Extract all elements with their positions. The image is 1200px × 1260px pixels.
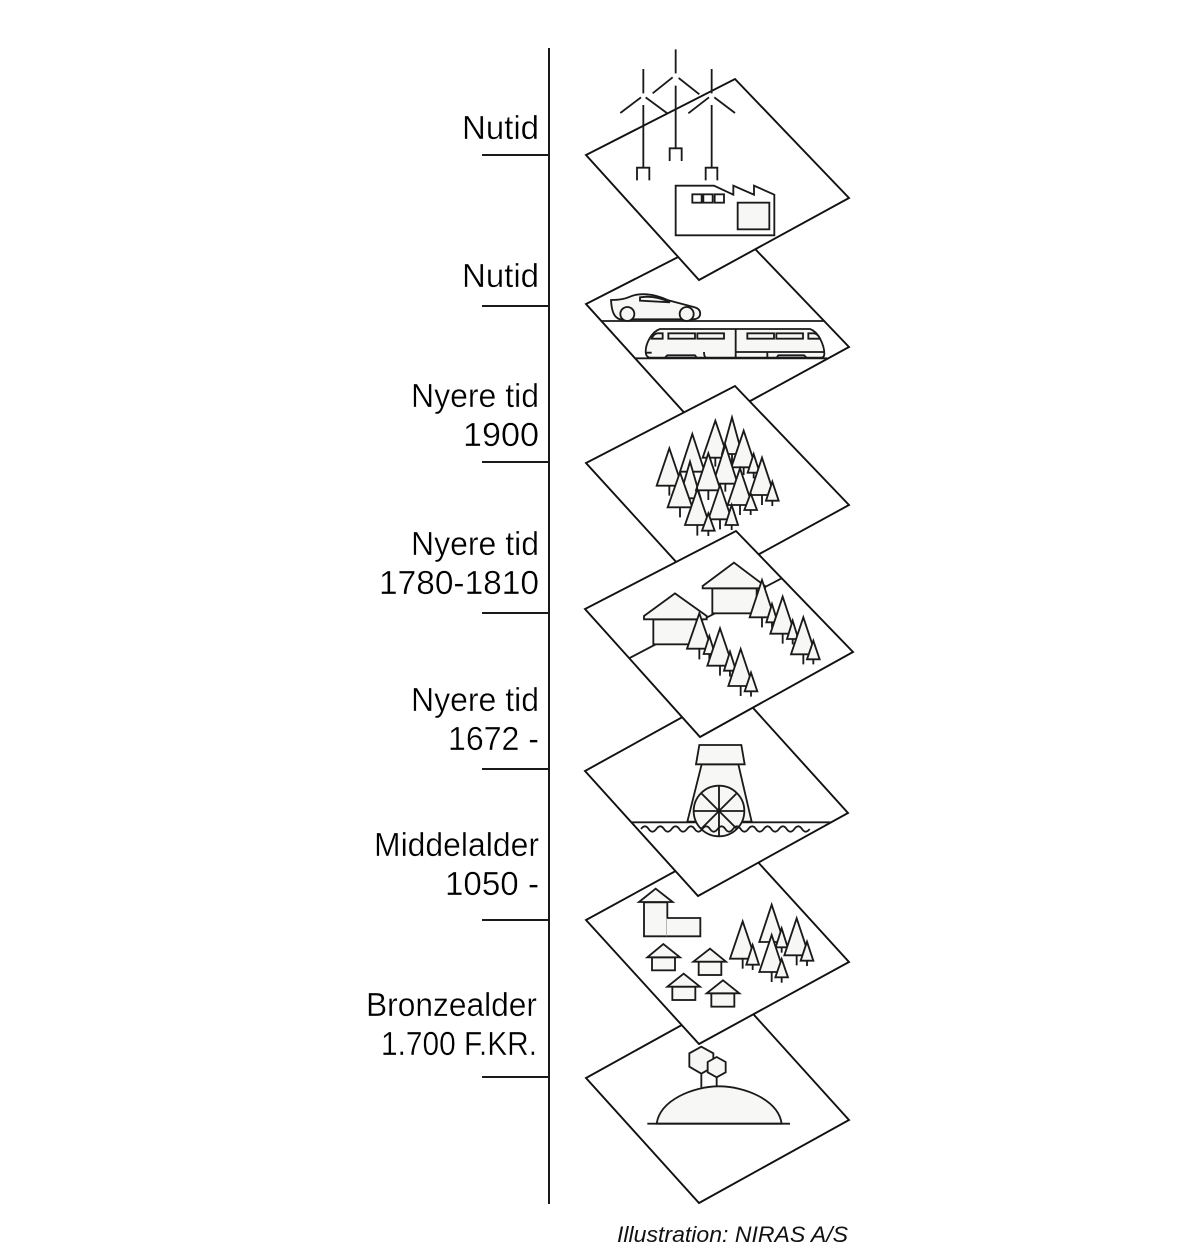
label: Nutid (transport): Nutid xyxy=(462,257,539,294)
label: Middelalder 1050 - xyxy=(374,826,539,902)
icon: village and trees xyxy=(639,889,813,1007)
icon: factory xyxy=(676,186,774,235)
icon: water mill xyxy=(632,745,831,836)
label: Nyere tid 1672 -: Nyere tid xyxy=(411,681,539,718)
panel: forest xyxy=(586,386,849,587)
label: Nyere tid 1900: 1900 xyxy=(463,416,539,453)
icon: wind turbines xyxy=(620,49,774,235)
label: Nyere tid 1672 -: 1672 - xyxy=(448,720,539,757)
caption: illustration credit: Illustration: NIRAS A/S xyxy=(617,1222,848,1247)
timeline axis xyxy=(482,48,549,1204)
label: Middelalder 1050 -: Middelalder xyxy=(374,826,539,863)
panel: water mill xyxy=(585,688,848,896)
panel: car and train xyxy=(586,228,849,429)
label: Middelalder 1050 -: 1050 - xyxy=(445,865,539,902)
label: Bronzealder 1.700 F.KR. xyxy=(366,986,537,1062)
label: Nyere tid 1780-1810 xyxy=(379,525,539,601)
label: Nyere tid 1900: Nyere tid xyxy=(411,377,539,414)
label: Nyere tid 1672 - xyxy=(411,681,539,757)
panel: farmhouses and trees xyxy=(585,531,853,737)
panel: bronze age burial mound xyxy=(586,995,849,1203)
icon: farmhouses and trees xyxy=(629,563,820,697)
label: Nyere tid 1780-1810: Nyere tid xyxy=(411,525,539,562)
label: Bronzealder 1.700 F.KR.: Bronzealder xyxy=(366,986,537,1023)
icon: car and train xyxy=(601,294,827,358)
label: Nyere tid 1780-1810: 1780-1810 xyxy=(379,564,539,601)
label: Nyere tid 1900 xyxy=(411,377,539,453)
label: Nutid (energy): Nutid xyxy=(462,109,539,146)
icon: forest xyxy=(657,417,779,536)
panel: wind turbines and factory xyxy=(586,49,849,280)
icon: mound with two trees xyxy=(647,1047,790,1124)
label: Bronzealder 1.700 F.KR.: 1.700 F.KR. xyxy=(381,1025,537,1062)
panel: medieval village xyxy=(586,838,849,1044)
